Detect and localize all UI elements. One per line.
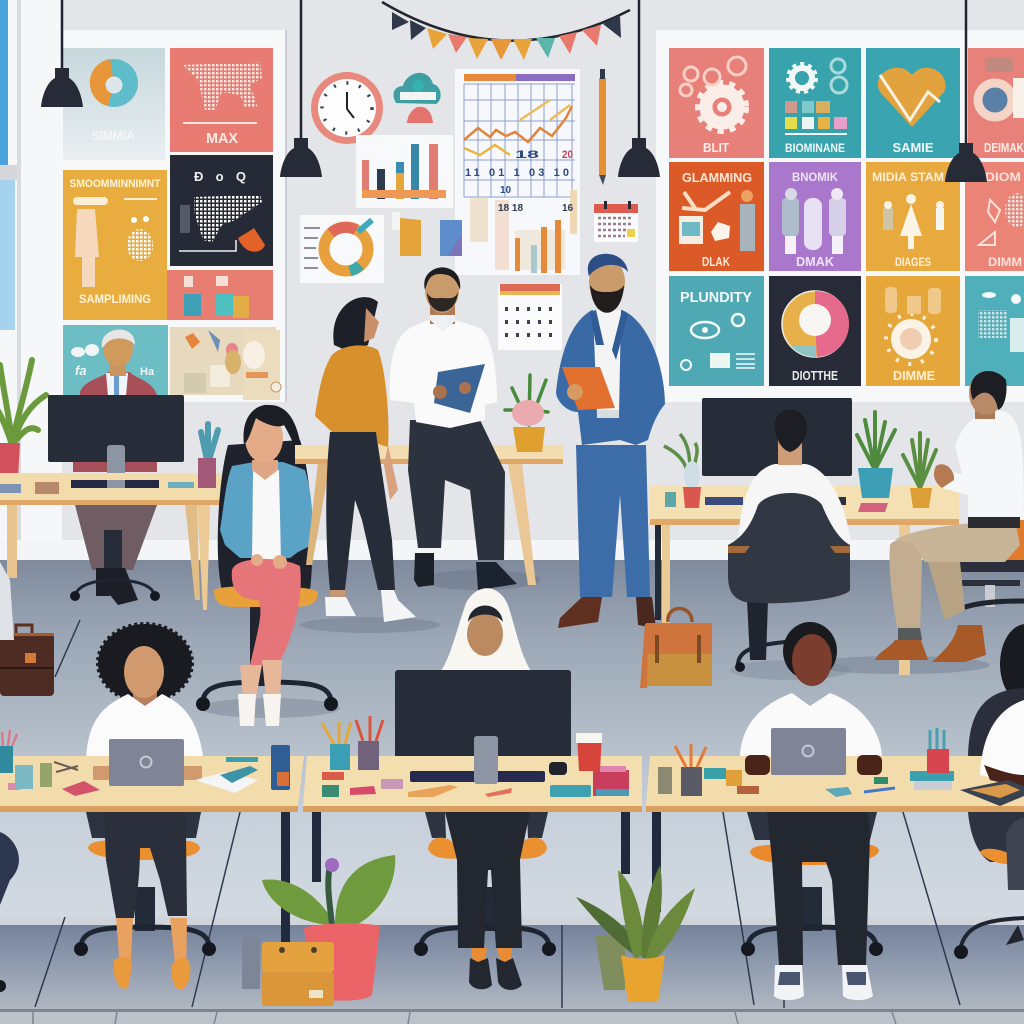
monitor: back right bbox=[702, 398, 852, 476]
chair: left bbox=[74, 812, 216, 956]
poster: gear teal: BIOMINANE bbox=[785, 141, 845, 155]
poster: red gear bbox=[968, 48, 1024, 158]
desk: back middle bbox=[295, 445, 563, 585]
woman with curly hair bbox=[74, 624, 216, 990]
desk items: front left bbox=[0, 730, 290, 796]
poster: purple people bbox=[769, 162, 861, 271]
chart: calendar with line graph: 16 bbox=[562, 203, 574, 214]
poster: coral bbox=[965, 162, 1024, 271]
panel: right poster wall bbox=[656, 30, 1024, 402]
bunting bbox=[382, 2, 630, 60]
poster: red strip bbox=[167, 270, 273, 320]
poster: dark map: Ð o Q bbox=[194, 169, 246, 184]
chart: bar chart bbox=[356, 135, 453, 208]
chart: calendar with line graph bbox=[455, 69, 580, 275]
desk: back left bbox=[0, 473, 222, 610]
office chair: back right bbox=[728, 493, 850, 672]
poster: teal eye: PLUNDITY bbox=[680, 289, 752, 306]
plant: spiky on desk bbox=[505, 375, 548, 452]
poster: yellow bbox=[63, 170, 167, 320]
poster: world map red bbox=[170, 48, 273, 152]
poster: gears: BLIT bbox=[703, 140, 729, 155]
floor bbox=[0, 540, 1024, 1024]
chart: calendar with line graph: 11 01 1 03 10 bbox=[465, 167, 569, 179]
far right chair and legs bbox=[954, 812, 1024, 959]
chart: donut document bbox=[300, 215, 384, 283]
leather bag bbox=[640, 608, 712, 688]
monitor: back left bbox=[48, 395, 184, 489]
white shirt and notebook: far right person bbox=[960, 700, 1024, 806]
chair and knee far left bbox=[0, 832, 19, 992]
poster: dark pie bbox=[769, 276, 861, 386]
desk items: front centre bbox=[322, 716, 629, 797]
poster: teal eye bbox=[669, 276, 764, 386]
poster: donut: SIMMIA bbox=[91, 128, 136, 143]
panel: left poster wall bbox=[62, 30, 287, 402]
poster: world map red: MAX bbox=[206, 130, 238, 147]
poster: heart: SAMIE bbox=[892, 140, 934, 155]
poster: teal with man bbox=[63, 325, 168, 397]
plant: centre pot with bag bbox=[242, 855, 395, 1006]
legs and shoes: right man bbox=[767, 812, 873, 1000]
poster: yellow figures bbox=[866, 162, 960, 271]
plants: right desk bbox=[664, 412, 936, 508]
man in blue suit and turban bbox=[556, 254, 665, 628]
icon: cloud bbox=[394, 73, 441, 123]
poster: purple people: BNOMIK bbox=[792, 170, 838, 184]
poster: orange: GLAMMING bbox=[682, 170, 752, 185]
poster: dark pie: DIOTTHE bbox=[792, 368, 838, 383]
plant: left bbox=[0, 360, 46, 478]
monitor: front center bbox=[395, 670, 571, 784]
legs and shoes: left woman bbox=[104, 812, 190, 990]
woman in hijab bbox=[440, 588, 532, 672]
poster: yellow sun: DIMME bbox=[893, 368, 935, 383]
desk: back right bbox=[650, 486, 959, 675]
desk items: front right bbox=[658, 728, 954, 797]
poster: coral: DIOM bbox=[985, 170, 1021, 184]
poster: teal right bbox=[965, 276, 1024, 386]
chair: right man bbox=[741, 812, 883, 956]
clock bbox=[311, 72, 383, 144]
poster: yellow: SAMPLIMING bbox=[79, 292, 151, 306]
wall bbox=[0, 0, 1024, 562]
woman in mustard top standing bbox=[315, 297, 416, 622]
briefcase: left bbox=[0, 625, 54, 696]
poster: collage bbox=[170, 327, 281, 400]
blue plant on desk bbox=[198, 424, 218, 488]
pen bbox=[599, 69, 606, 185]
poster: teal with man: fa bbox=[75, 363, 87, 378]
centre woman chair and legs bbox=[414, 812, 556, 990]
poster: coral: DIMM bbox=[988, 255, 1022, 269]
chart: calendar with line graph: 10 bbox=[500, 185, 512, 196]
poster: donut bbox=[63, 48, 165, 160]
poster: teal with man: Ha bbox=[140, 366, 155, 378]
poster: gear teal bbox=[769, 48, 861, 158]
seated man at right bbox=[875, 371, 1024, 662]
poster: purple people: DMAK bbox=[796, 254, 835, 269]
person at far right bbox=[968, 624, 1024, 760]
woman in blue jacket sitting bbox=[196, 405, 338, 726]
man in red jacket at back left bbox=[70, 329, 160, 605]
chart: calendar with line graph: 20 bbox=[562, 149, 573, 161]
desks: front row bbox=[0, 756, 1024, 942]
person at far left background bbox=[0, 562, 14, 640]
wall calendar bbox=[498, 284, 562, 350]
poster: orange bbox=[669, 162, 764, 271]
poster: gears bbox=[669, 48, 764, 158]
chart: calendar with line graph: 18 bbox=[515, 149, 539, 161]
person seen from behind at back right bbox=[738, 410, 851, 545]
plant: snake plant bbox=[576, 865, 695, 1002]
man with white shirt and tablet bbox=[390, 267, 517, 590]
sticky notes bbox=[392, 212, 462, 256]
small calendar bbox=[594, 201, 638, 242]
poster: yellow sun bbox=[866, 276, 960, 386]
poster: heart bbox=[866, 48, 960, 158]
poster: dark map bbox=[170, 155, 273, 266]
hanging lamps bbox=[41, 0, 987, 182]
poster: yellow figures: MIDIA STAM bbox=[872, 170, 944, 184]
poster: orange: DLAK bbox=[702, 254, 730, 269]
man smiling bbox=[740, 622, 883, 1000]
poster: yellow: SMOOMMINNIMNT bbox=[70, 178, 161, 190]
window bbox=[0, 0, 62, 562]
poster: yellow figures: DIAGES bbox=[895, 255, 931, 269]
chart: calendar with line graph: 18 18 bbox=[498, 203, 523, 214]
